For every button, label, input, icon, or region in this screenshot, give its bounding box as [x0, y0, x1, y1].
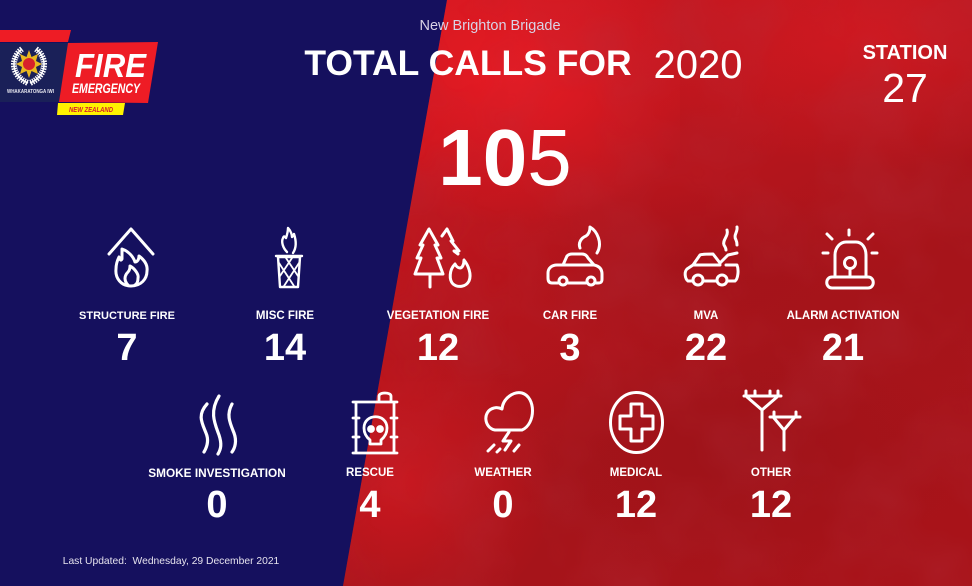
value: structure fire: 7: [116, 327, 138, 369]
year: 2020: [654, 43, 742, 87]
background: navy and red split: [343, 0, 972, 586]
brigade name: New Brighton Brigade: [419, 18, 561, 34]
logo: Fire and Emergency New Zealand: FIRE: [75, 47, 147, 84]
label: smoke investigation: SMOKE INVESTIGATION: [148, 466, 286, 480]
value: car fire: 3: [559, 327, 581, 369]
logo: crest wreath: WHAKARATONGA IWI: [7, 89, 55, 95]
value: weather: 0: [492, 484, 514, 526]
logo: Fire and Emergency New Zealand: NEW ZEALAND: [69, 107, 113, 114]
total calls: 105: [438, 113, 572, 202]
logo: Fire and Emergency New Zealand: EMERGENCY: [72, 81, 142, 96]
value: misc fire: 14: [264, 327, 306, 369]
label: car fire: CAR FIRE: [543, 310, 597, 322]
label: structure fire: STRUCTURE FIRE: [79, 310, 175, 322]
label: medical: MEDICAL: [610, 467, 662, 479]
logo: crest wreath: [7, 49, 55, 95]
station label: STATION: [863, 42, 947, 64]
last updated note: Last Updated: Wednesday, 29 December 2021: [63, 556, 279, 567]
station number: 27: [882, 65, 928, 111]
logo: Fire and Emergency New Zealand: [0, 30, 158, 115]
label: other: OTHER: [751, 467, 791, 479]
value: medical: 12: [615, 484, 657, 526]
label: weather: WEATHER: [474, 467, 532, 479]
value: alarm activation: 21: [822, 327, 864, 369]
label: rescue: RESCUE: [346, 467, 394, 479]
label: alarm activation: ALARM ACTIVATION: [787, 310, 899, 322]
value: MVA: 22: [685, 327, 727, 369]
label: misc fire: MISC FIRE: [256, 310, 314, 322]
label: vegetation fire: VEGETATION FIRE: [387, 310, 489, 322]
value: rescue: 4: [359, 484, 381, 526]
value: other: 12: [750, 484, 792, 526]
value: vegetation fire: 12: [417, 327, 459, 369]
title: TOTAL CALLS FOR: [304, 43, 632, 83]
value: smoke investigation: 0: [206, 484, 228, 526]
label: MVA: MVA: [694, 310, 718, 322]
